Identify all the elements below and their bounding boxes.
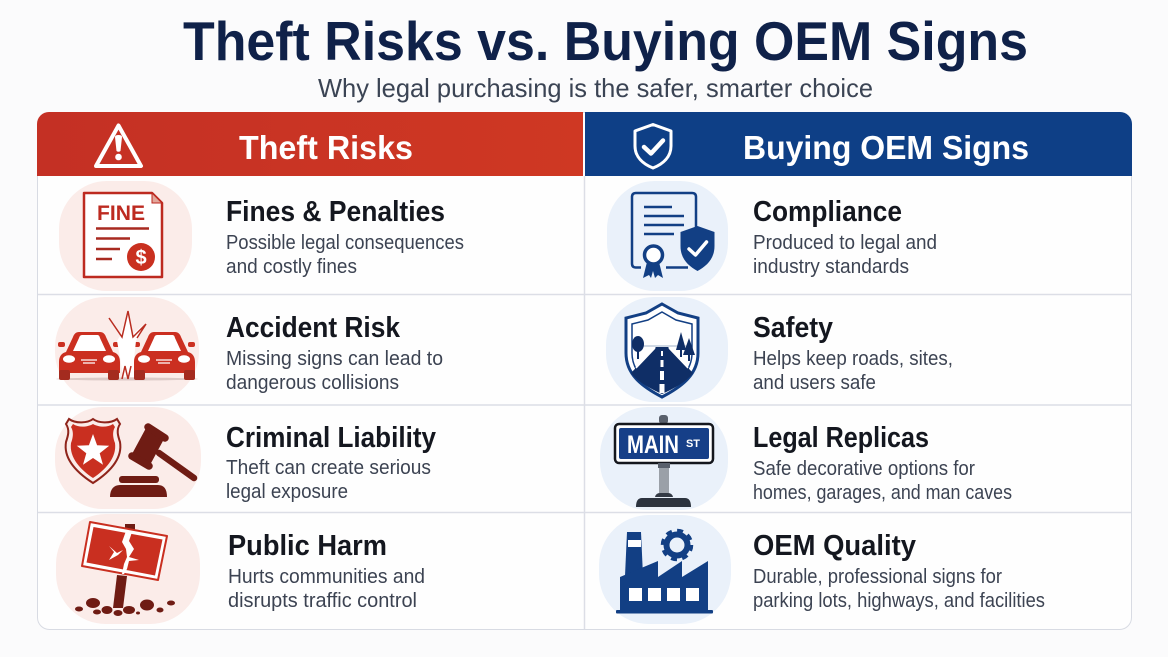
icon: fine document xyxy=(59,181,192,291)
text: OEM quality xyxy=(753,530,1045,612)
text: accident risk: Missing signs can lead to xyxy=(226,348,443,370)
gavel xyxy=(110,427,194,497)
text: compliance: Produced to legal and xyxy=(753,232,937,254)
icon: main street sign: MAIN xyxy=(627,431,679,459)
text: OEM quality: parking lots, highways, and facilities xyxy=(753,590,1045,612)
text: safety: and users safe xyxy=(753,372,876,394)
collision burst xyxy=(109,311,146,379)
text: legal replicas: homes, garages, and man caves xyxy=(753,482,1012,504)
text: criminal liability: Theft can create serious xyxy=(226,457,431,479)
icon: main street sign xyxy=(600,407,728,510)
row: accident risk xyxy=(55,297,443,402)
icon: fine document: FINE xyxy=(97,202,145,225)
text: accident risk: dangerous collisions xyxy=(226,372,399,394)
text: safety: Helps keep roads, sites, xyxy=(753,348,953,370)
icon: road shield xyxy=(606,297,728,402)
text: fines and penalties: Possible legal consequences xyxy=(226,232,464,254)
icon: certificate with shield xyxy=(607,181,728,291)
icon: colliding cars xyxy=(55,297,199,402)
text: public harm: Hurts communities and xyxy=(228,566,425,588)
car right xyxy=(133,332,195,380)
text: fines and penalties xyxy=(226,196,464,278)
row: safety xyxy=(606,297,953,402)
row: legal replicas xyxy=(600,407,1012,510)
text: public harm: Public Harm xyxy=(228,530,387,562)
text: compliance: industry standards xyxy=(753,256,909,278)
text: fines and penalties: and costly fines xyxy=(226,256,357,278)
text: compliance xyxy=(753,196,937,278)
header: theft risks xyxy=(37,112,583,176)
text: public harm xyxy=(228,530,425,612)
icon: factory and gear xyxy=(599,515,731,624)
text: OEM quality: Durable, professional signs for xyxy=(753,566,1002,588)
text: fines and penalties: Fines & Penalties xyxy=(226,196,445,228)
text: safety xyxy=(753,312,953,394)
row: compliance xyxy=(607,181,937,291)
header: buying OEM signs: Buying OEM Signs xyxy=(743,129,1029,166)
comparison table panel xyxy=(37,112,1132,630)
icon: badge and gavel xyxy=(55,407,201,509)
subtitle: Why legal purchasing is the safer, smarter choice xyxy=(318,73,873,103)
text: accident risk: Accident Risk xyxy=(226,312,401,344)
text: legal replicas xyxy=(753,422,1012,504)
icon: broken sign xyxy=(56,514,200,624)
text: criminal liability: legal exposure xyxy=(226,481,348,503)
text: criminal liability: Criminal Liability xyxy=(226,422,436,454)
row: criminal liability xyxy=(55,407,436,509)
text: criminal liability xyxy=(226,422,436,503)
text: legal replicas: Safe decorative options for xyxy=(753,458,975,480)
car left xyxy=(58,332,120,380)
icon: warning triangle xyxy=(96,126,141,166)
text: safety: Safety xyxy=(753,312,833,344)
icon: fine document: $ xyxy=(135,247,147,269)
text: compliance: Compliance xyxy=(753,196,902,228)
text: accident risk xyxy=(226,312,443,394)
header: buying OEM signs xyxy=(585,112,1132,176)
title: Theft Risks vs. Buying OEM Signs xyxy=(183,10,1028,72)
icon: shield check xyxy=(635,124,671,168)
text: legal replicas: Legal Replicas xyxy=(753,422,929,454)
row: fines and penalties xyxy=(59,181,464,291)
text: public harm: disrupts traffic control xyxy=(228,590,417,612)
text: OEM quality: OEM Quality xyxy=(753,530,916,562)
icon: main street sign: ST xyxy=(686,438,700,450)
row: OEM quality xyxy=(599,515,1045,624)
police badge xyxy=(66,419,120,483)
header: theft risks: Theft Risks xyxy=(239,129,413,166)
row: public harm xyxy=(56,514,425,624)
